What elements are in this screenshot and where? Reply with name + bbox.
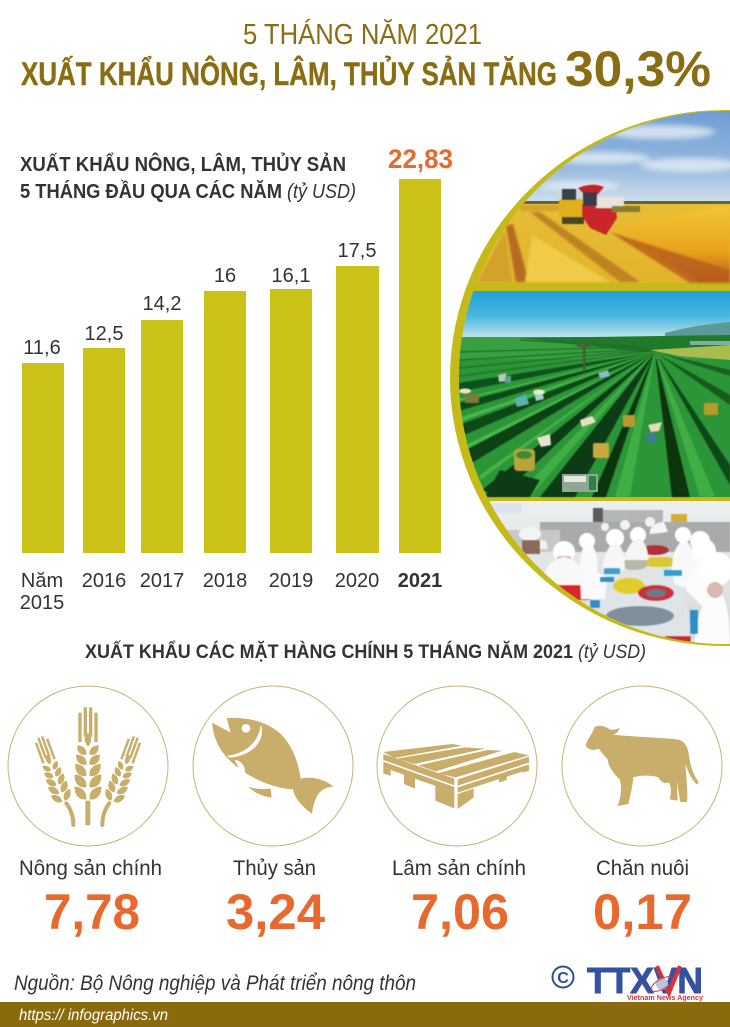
globe emblem [649, 966, 680, 994]
icon: fish [193, 686, 353, 846]
label: Lâm sản chính [392, 857, 526, 880]
chart heading [20, 152, 356, 203]
bar 2018: 2018 [203, 570, 247, 592]
photo: rice harvest [460, 108, 730, 283]
bar 2016: 2016 [82, 570, 126, 592]
bar 2019: 16,1 [272, 265, 310, 287]
photo collage [450, 108, 730, 651]
agency tagline: Vietnam News Agency [627, 995, 703, 1002]
icon: cow [562, 686, 722, 846]
bar 2020 [335, 240, 379, 592]
bar 2018 [203, 265, 247, 592]
logo: TTXVN [552, 960, 703, 1002]
title [21, 18, 711, 97]
bar 2016: 12,5 [85, 323, 123, 345]
bar 2015: 2015 [20, 592, 64, 614]
panel: forestry products [377, 686, 537, 940]
bar 2018: 16 [214, 265, 236, 287]
bar 2017: 14,2 [143, 293, 181, 315]
bar 2020: 2020 [335, 570, 379, 592]
copyright symbol [552, 966, 574, 988]
label: Thủy sản [233, 857, 316, 880]
chart heading: 5 THÁNG ĐẦU QUA CÁC NĂM [20, 180, 282, 203]
bar 2019 [269, 265, 313, 592]
value: 7,06 [411, 884, 509, 940]
bar 2021: 2021 [398, 570, 442, 592]
panel: livestock [562, 686, 722, 940]
value: 0,17 [593, 884, 692, 940]
bar 2020: 17,5 [338, 240, 376, 262]
title line 2: XUẤT KHẨU NÔNG, LÂM, THỦY SẢN TĂNG [21, 56, 557, 92]
section heading: main exports: (tỷ USD) [578, 642, 646, 663]
bar 2015 [20, 337, 64, 614]
footer band [0, 1002, 730, 1027]
olive crescent backing [450, 110, 730, 646]
bar 2019: 2019 [269, 570, 313, 592]
value: 7,78 [44, 884, 140, 940]
website url: https:// infographics.vn [19, 1007, 168, 1024]
chart heading: XUẤT KHẨU NÔNG, LÂM, THỦY SẢN [20, 152, 346, 176]
bar 2015: 11,6 [23, 337, 61, 359]
label: Chăn nuôi [596, 857, 689, 880]
headline percentage: 30,3% [565, 41, 711, 97]
icon: wooden pallet [377, 686, 537, 846]
source note: Nguồn: Bộ Nông nghiệp và Phát triển nông thôn [14, 972, 416, 995]
panel: seafood [193, 686, 353, 940]
bar 2017 [140, 293, 184, 592]
icon: wheat [8, 686, 168, 846]
chart heading: (tỷ USD) [287, 181, 356, 203]
panel: agricultural products [8, 686, 168, 940]
bar 2016 [82, 323, 126, 592]
section heading: main exports: XUẤT KHẨU CÁC MẶT HÀNG CHÍNH 5 THÁNG NĂM 2021 [85, 641, 573, 663]
bar 2015: Năm [21, 570, 63, 592]
photo: tea plantation [455, 291, 730, 497]
value: 3,24 [226, 884, 325, 940]
agency wordmark: TTXVN [587, 960, 703, 1001]
bar chart [20, 144, 453, 614]
copyright symbol: C [557, 970, 569, 987]
label: Nông sản chính [19, 857, 162, 880]
bar 2017: 2017 [140, 570, 184, 592]
bar 2021: 22,83 [388, 144, 453, 174]
photo: seafood processing factory [490, 501, 730, 644]
bar 2021 [388, 144, 453, 592]
title line 1: 5 THÁNG NĂM 2021 [243, 18, 482, 51]
